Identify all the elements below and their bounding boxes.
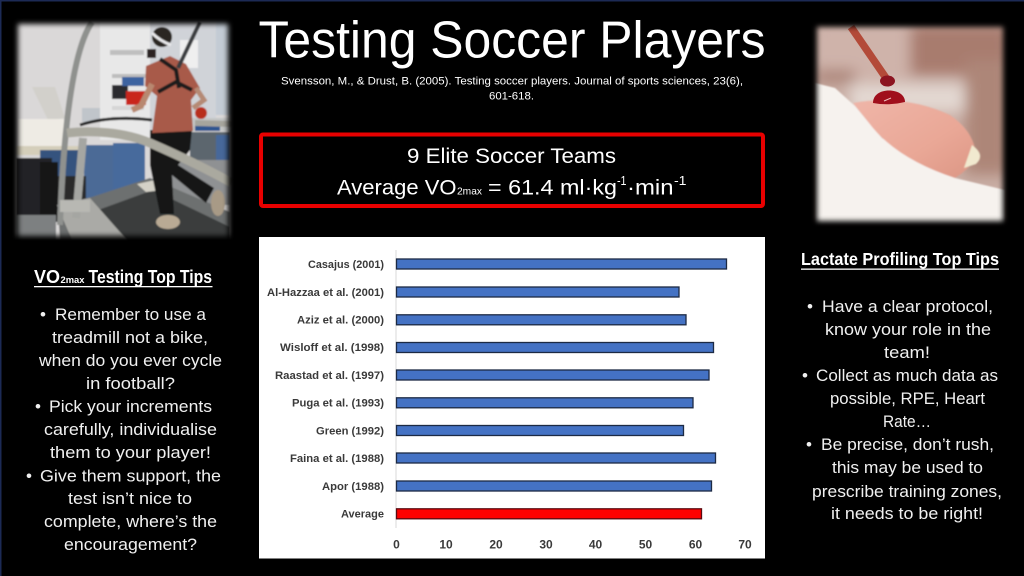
callout: elite team average VO2max: 9 Elite Soccer Teams bbox=[407, 144, 616, 168]
heading: lactate profiling top tips: Lactate Profiling Top Tips bbox=[801, 249, 999, 269]
citation bbox=[281, 76, 743, 102]
category labels: Average bbox=[341, 508, 384, 520]
tip 3: Give them support, the bbox=[40, 466, 221, 486]
text block: lactate tips bbox=[802, 297, 1002, 523]
tip 1: know your role in the bbox=[825, 320, 991, 339]
tip 3: • bbox=[806, 435, 812, 454]
bars bbox=[396, 259, 726, 519]
tip 2: Rate… bbox=[883, 412, 931, 431]
tip 3: this may be used to bbox=[832, 458, 983, 477]
callout: elite team average VO2max: ·min bbox=[627, 176, 674, 200]
x axis labels: 40 bbox=[589, 538, 602, 552]
category labels: Raastad et al. (1997) bbox=[275, 370, 384, 382]
callout: elite team average VO2max: -1 bbox=[674, 174, 687, 188]
category labels: Faina et al. (1988) bbox=[290, 453, 384, 465]
heading: VO2max top tips: 2max bbox=[60, 275, 85, 286]
category labels: Casajus (2001) bbox=[308, 259, 384, 271]
callout: elite team average VO2max: = 61.4 ml·kg bbox=[488, 176, 617, 200]
x axis labels: 70 bbox=[738, 538, 752, 552]
tip 3 bbox=[806, 435, 1002, 523]
tip 2: Collect as much data as bbox=[816, 366, 998, 385]
tip 1 bbox=[807, 297, 993, 362]
category labels bbox=[267, 259, 384, 520]
tip 1: team! bbox=[884, 343, 930, 362]
x axis labels: 30 bbox=[539, 538, 553, 552]
x axis labels: 50 bbox=[639, 538, 652, 552]
tip 2: them to your player! bbox=[50, 443, 211, 462]
photo: treadmill VO2max test bbox=[10, 15, 235, 240]
tip 3: test isn’t nice to bbox=[68, 489, 192, 508]
tip 3 bbox=[26, 466, 221, 554]
heading: VO2max top tips: Testing Top Tips bbox=[88, 267, 212, 287]
tip 3: complete, where’s the bbox=[44, 512, 217, 531]
tip 3: prescribe training zones, bbox=[812, 482, 1002, 501]
tip 2: • bbox=[802, 366, 808, 385]
tip 1: Have a clear protocol, bbox=[822, 297, 993, 316]
x axis labels: 0 bbox=[393, 538, 400, 552]
bar chart: VO2max by study bbox=[259, 237, 765, 558]
category labels: Aziz et al. (2000) bbox=[297, 314, 384, 326]
tip 2: possible, RPE, Heart bbox=[830, 389, 985, 408]
tip 1: • bbox=[807, 297, 813, 316]
tip 1: • bbox=[40, 305, 46, 324]
callout: elite team average VO2max bbox=[261, 134, 763, 206]
tip 3: encouragement? bbox=[64, 535, 197, 554]
callout: elite team average VO2max: Average VO bbox=[337, 176, 456, 200]
x axis labels: 60 bbox=[689, 538, 702, 552]
category labels: Puga et al. (1993) bbox=[292, 398, 384, 410]
citation: Svensson, M., & Drust, B. (2005). Testing soccer players. Journal of sports sciences, 23(6), bbox=[281, 76, 743, 88]
x axis labels bbox=[393, 538, 752, 552]
heading: VO2max top tips: VO bbox=[34, 267, 60, 287]
tip 2: Pick your increments bbox=[49, 397, 212, 416]
tip 1: in football? bbox=[86, 374, 175, 393]
x axis labels: 10 bbox=[439, 538, 453, 552]
category labels: Green (1992) bbox=[316, 426, 384, 438]
text block: VO2max tips bbox=[26, 305, 222, 554]
category labels: Apor (1988) bbox=[322, 481, 384, 493]
tip 3: Be precise, don’t rush, bbox=[821, 435, 994, 454]
tip 1: when do you ever cycle bbox=[38, 351, 222, 370]
title: Testing Soccer Players bbox=[258, 12, 766, 70]
callout: elite team average VO2max: -1 bbox=[617, 174, 627, 188]
tip 3: • bbox=[26, 466, 32, 486]
tip 3: it needs to be right! bbox=[831, 504, 983, 523]
category labels: Al-Hazzaa et al. (2001) bbox=[267, 287, 384, 299]
heading: VO2max top tips bbox=[34, 267, 212, 287]
tip 1 bbox=[38, 305, 222, 393]
citation: 601-618. bbox=[489, 90, 534, 102]
tip 2: carefully, individualise bbox=[44, 420, 217, 439]
x axis labels: 20 bbox=[489, 538, 503, 552]
tip 2 bbox=[35, 397, 217, 462]
callout: elite team average VO2max: 2max bbox=[457, 186, 483, 198]
tip 2 bbox=[802, 366, 998, 431]
tip 2: • bbox=[35, 397, 41, 416]
photo: lactate blood sample on finger bbox=[812, 22, 1008, 226]
category labels: Wisloff et al. (1998) bbox=[280, 342, 384, 354]
runner bbox=[150, 130, 214, 214]
tip 1: Remember to use a bbox=[55, 305, 207, 324]
tip 1: treadmill not a bike, bbox=[52, 328, 208, 347]
